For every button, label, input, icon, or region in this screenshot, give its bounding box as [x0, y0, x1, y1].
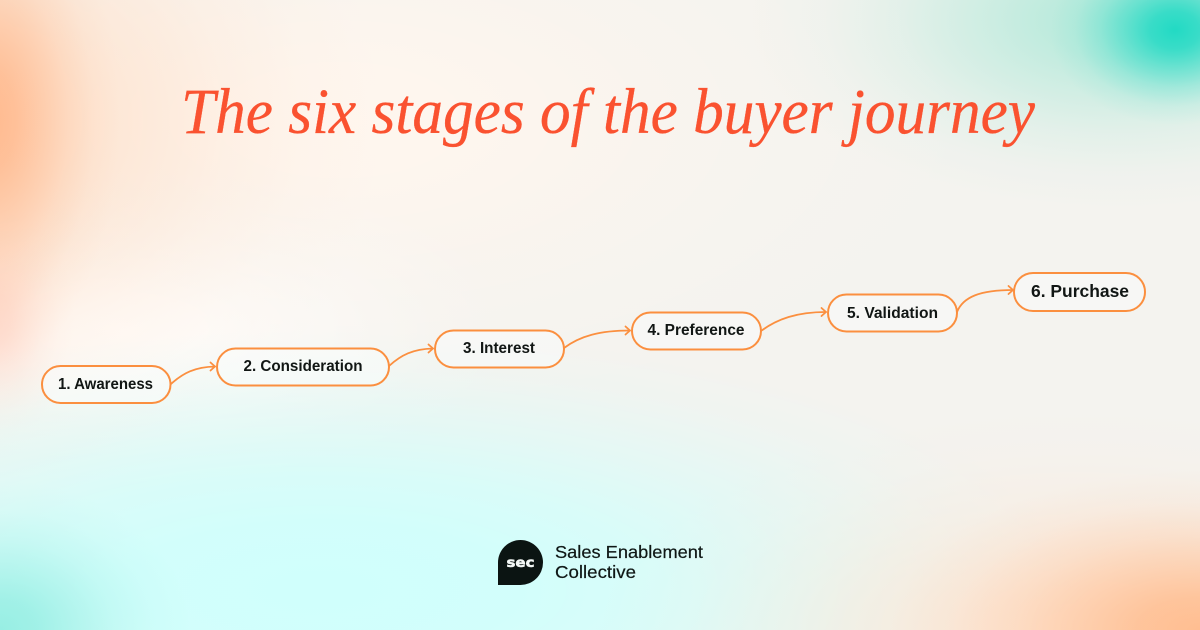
title: The six stages of the buyer journey	[181, 76, 1035, 148]
stage 4: Preference	[632, 312, 761, 350]
stage 1: Awareness	[42, 366, 170, 403]
stage 5: Validation	[828, 294, 957, 332]
stage 2: Consideration	[217, 348, 389, 386]
stage 1: Awareness: 1. Awareness	[58, 376, 153, 393]
stage 3: Interest	[435, 330, 564, 368]
stage 6: Purchase	[1014, 273, 1145, 311]
arrow 5 to 6	[957, 286, 1013, 312]
logo wordmark	[555, 542, 703, 582]
logo wordmark: Collective	[555, 562, 636, 582]
journey flow	[42, 273, 1145, 403]
stage 4: Preference: 4. Preference	[648, 322, 745, 339]
stage 6: Purchase: 6. Purchase	[1031, 281, 1129, 301]
stage 3: Interest: 3. Interest	[463, 340, 535, 357]
stage 2: Consideration: 2. Consideration	[244, 358, 362, 375]
arrow 4 to 5	[761, 308, 826, 331]
stage 5: Validation: 5. Validation	[847, 305, 938, 322]
arrow 1 to 2	[171, 362, 215, 384]
logo wordmark: Sales Enablement	[555, 542, 703, 562]
icon: sec badge: sec	[506, 556, 534, 571]
icon: sec badge	[498, 540, 543, 585]
logo: Sales Enablement Collective	[498, 540, 703, 585]
arrow 3 to 4	[564, 326, 630, 348]
arrow 2 to 3	[389, 344, 433, 366]
